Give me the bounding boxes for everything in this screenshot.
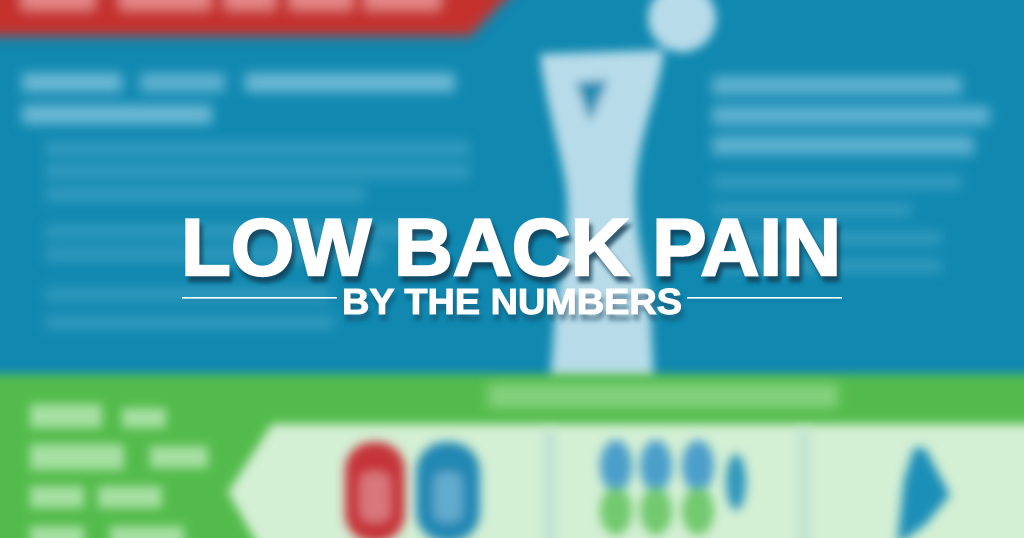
icon: red and blue people bbox=[345, 442, 480, 538]
panel: pale arrow box bbox=[228, 424, 1024, 538]
text: green top heading bbox=[488, 384, 838, 408]
subtitle: by the numbers: BY THE NUMBERS bbox=[342, 281, 682, 322]
dividers bbox=[544, 430, 810, 538]
panel: blue left text bbox=[22, 73, 470, 330]
text: green left heading bbox=[30, 404, 208, 538]
panel: red banner bbox=[0, 0, 525, 36]
icon: person silhouette bbox=[897, 448, 950, 538]
icon: human figure bbox=[540, 0, 716, 385]
right rule bbox=[687, 297, 842, 299]
title: low back pain: LOW BACK PAIN bbox=[181, 203, 841, 293]
left rule bbox=[182, 297, 337, 299]
icon: group of people bbox=[600, 440, 746, 535]
panel: blue right text bbox=[712, 76, 990, 273]
panel: green section bbox=[0, 374, 1024, 538]
